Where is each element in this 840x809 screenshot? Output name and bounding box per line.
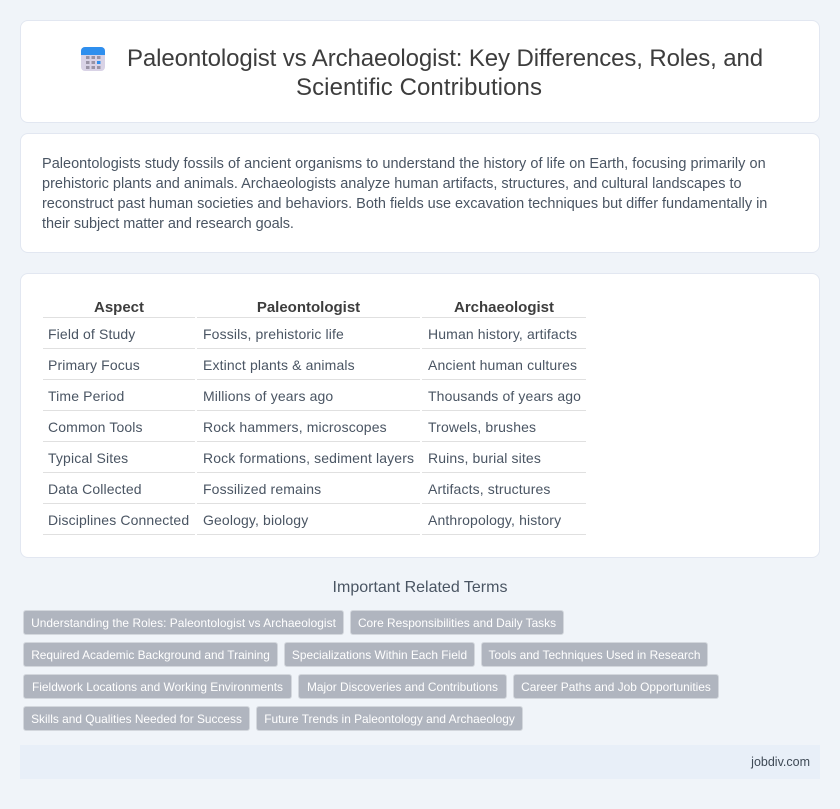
comparison table: Human history, artifacts (428, 326, 577, 342)
comparison table: Archaeologist (454, 298, 554, 316)
comparison table: Fossilized remains (203, 481, 321, 497)
comparison table: Thousands of years ago (428, 388, 581, 404)
comparison table: Common Tools (48, 419, 143, 435)
comparison table: Rock formations, sediment layers (203, 450, 414, 466)
panel: comparison (20, 273, 820, 558)
comparison table: Artifacts, structures (428, 481, 551, 497)
title (127, 45, 763, 101)
comparison table: Ruins, burial sites (428, 450, 541, 466)
comparison table: Disciplines Connected (48, 512, 189, 528)
comparison table: Time Period (48, 388, 124, 404)
comparison table: Primary Focus (48, 357, 140, 373)
comparison table: Field of Study (48, 326, 135, 342)
tags: related terms: Required Academic Background and Training (31, 648, 270, 662)
comparison table: Anthropology, history (428, 512, 561, 528)
comparison table: Geology, biology (203, 512, 308, 528)
tags: related terms: Core Responsibilities and Daily Tasks (358, 616, 556, 630)
icon: calendar (81, 47, 105, 71)
panel: header (20, 20, 820, 123)
tags: related terms: Skills and Qualities Needed for Success (31, 712, 242, 726)
tags: related terms: Tools and Techniques Used in Research (489, 648, 700, 662)
comparison table (43, 298, 586, 535)
comparison table: Paleontologist (257, 298, 360, 316)
tags: related terms: Major Discoveries and Contributions (307, 680, 498, 694)
intro text: prehistoric plants and animals. Archaeologists analyze human artifacts, structures, and cultural landscapes to (42, 176, 742, 192)
footer bar (20, 745, 820, 779)
panel: intro (20, 133, 820, 253)
related terms heading: Important Related Terms (333, 579, 507, 596)
intro text (42, 156, 767, 232)
tags: related terms: Future Trends in Paleontology and Archaeology (264, 712, 515, 726)
comparison table: Ancient human cultures (428, 357, 577, 373)
tags: related terms: Fieldwork Locations and Working Environments (32, 680, 283, 694)
comparison table: Millions of years ago (203, 388, 333, 404)
tags: related terms: Specializations Within Each Field (292, 648, 467, 662)
tags: related terms: Understanding the Roles: Paleontologist vs Archaeologist (31, 616, 336, 630)
comparison table: Typical Sites (48, 450, 128, 466)
title: Paleontologist vs Archaeologist: Key Differences, Roles, and (127, 45, 763, 72)
tags: related terms: Career Paths and Job Opportunities (521, 680, 711, 694)
title: Scientific Contributions (296, 74, 542, 101)
intro text: reconstruct past human societies and behaviors. Both fields use excavation techniques but differ fundamentally in (42, 196, 767, 212)
comparison table: Data Collected (48, 481, 142, 497)
comparison table: Rock hammers, microscopes (203, 419, 387, 435)
footer site name: jobdiv.com (751, 755, 810, 769)
comparison table: Fossils, prehistoric life (203, 326, 344, 342)
intro text: their subject matter and research goals. (42, 216, 294, 232)
intro text: Paleontologists study fossils of ancient organisms to understand the history of life on Earth, focusing primarily on (42, 156, 766, 172)
comparison table: Trowels, brushes (428, 419, 536, 435)
comparison table: Extinct plants & animals (203, 357, 355, 373)
comparison table: Aspect (94, 298, 144, 316)
